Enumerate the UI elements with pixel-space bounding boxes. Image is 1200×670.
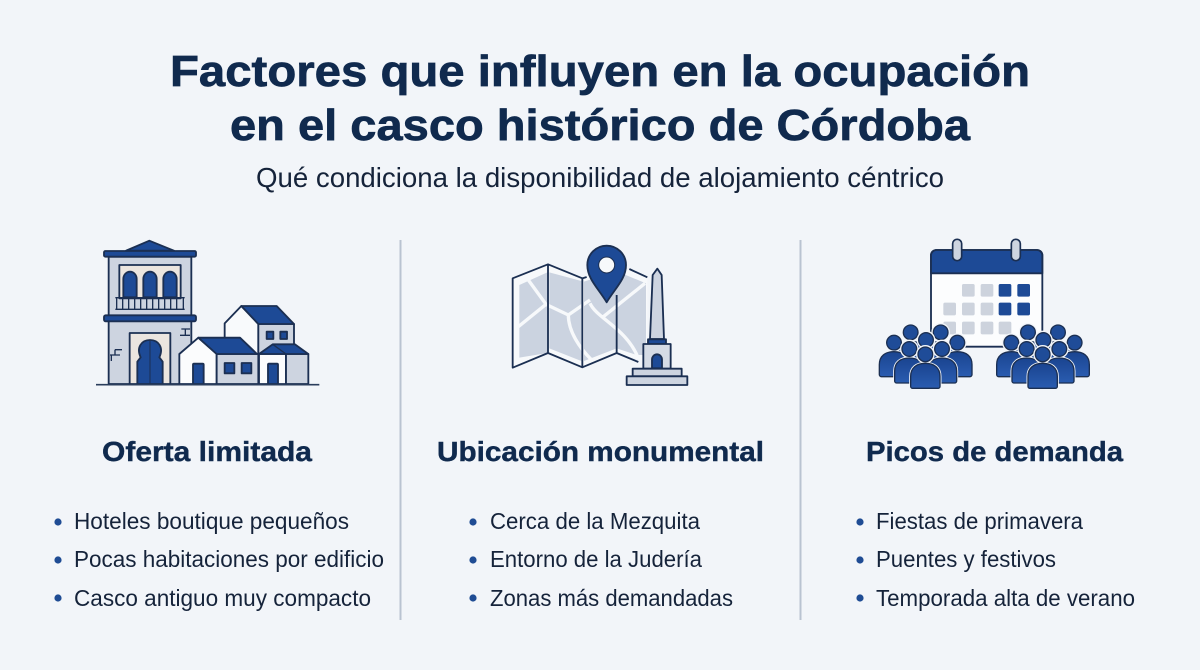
list [469,508,733,611]
title: Factores que influyen en la ocupación [170,47,1030,96]
list [54,508,384,611]
icon: map with pin and obelisk [513,246,687,385]
icon: calendar and crowds [879,239,1089,388]
panel: ubicación monumental [437,246,764,611]
list: Entorno de la Judería [490,546,703,572]
heading: Picos de demanda [866,436,1124,467]
list: Puentes y festivos [876,546,1056,572]
list: Fiestas de primavera [876,508,1084,534]
list: Zonas más demandadas [490,585,733,611]
list: Hoteles boutique pequeños [74,508,349,534]
title: en el casco histórico de Córdoba [230,101,971,150]
list: Temporada alta de verano [876,585,1135,611]
title [170,47,1030,150]
heading: Oferta limitada [102,436,313,467]
panel: oferta limitada [54,241,384,611]
list [856,508,1135,611]
icon: historic buildings [96,241,319,385]
list: Casco antiguo muy compacto [74,585,371,611]
list: Pocas habitaciones por edificio [74,546,384,572]
subtitle: Qué condiciona la disponibilidad de alojamiento céntrico [256,162,944,193]
panel: picos de demanda [856,239,1135,611]
heading: Ubicación monumental [437,436,764,467]
list: Cerca de la Mezquita [490,508,701,534]
